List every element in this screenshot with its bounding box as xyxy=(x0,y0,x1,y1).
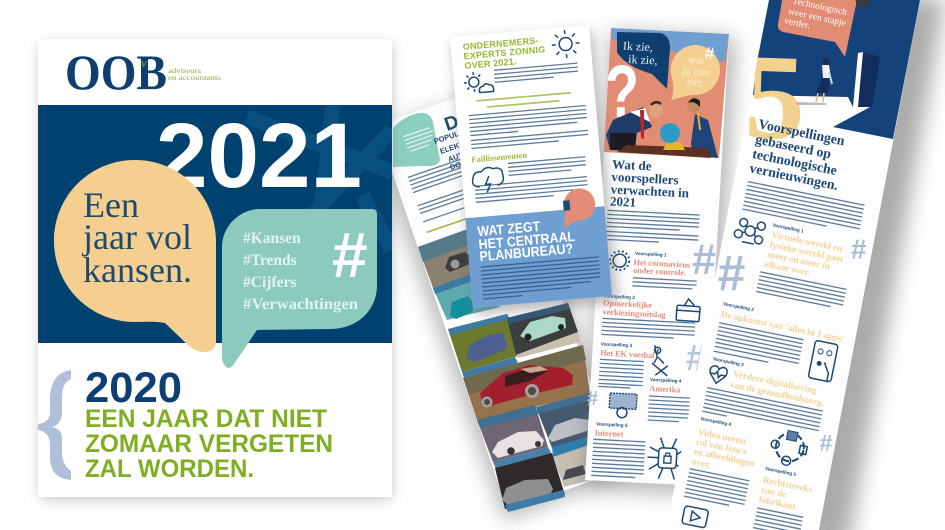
heading: popular electric cars: ELEKTRISCHE xyxy=(439,130,492,156)
item: voorspelling 3: Voorspelling 3 xyxy=(712,356,745,367)
text block: een jaar dat niet zomaar vergeten zal worden: ZAL WORDEN. xyxy=(85,455,254,483)
section: centraal planbureau xyxy=(464,186,612,308)
item: voorspelling 3: Voorspelling 3 xyxy=(601,341,633,348)
speech bubble: hashtags: #Trends xyxy=(243,252,297,269)
photo: dark blue car xyxy=(448,314,518,378)
item: voorspelling 5 xyxy=(591,421,646,478)
number: 5: 5 xyxy=(743,29,808,166)
item: voorspelling 2: Voorspelling 2 xyxy=(723,301,755,312)
speech bubble: technologisch: verder. xyxy=(783,16,811,32)
item: voorspelling 4: over. xyxy=(691,456,712,470)
item: voorspelling 5: van de xyxy=(760,484,787,499)
item: voorspelling 5: Internet xyxy=(594,428,624,439)
icon: hash small: # xyxy=(819,430,833,456)
illustration background: navy room xyxy=(753,0,921,139)
item: voorspelling 3 xyxy=(598,341,656,389)
photo: teal car xyxy=(433,270,500,320)
panel: cover xyxy=(38,39,392,497)
illustration: fortune tellers xyxy=(603,28,729,158)
speech bubble: technologisch xyxy=(778,0,858,57)
heading: voorspellingen gebaseerd op: vernieuwingen. xyxy=(748,160,840,193)
heading: wat de voorspellers verwachten: Wat de xyxy=(612,156,652,173)
speech bubble: ik zie xyxy=(617,32,670,89)
logo: OOB: en accountants xyxy=(168,74,221,82)
item: voorspelling 2: De opkomst van 'alles in 1 apps' xyxy=(720,309,846,344)
item: voorspelling 4: rol van foto's xyxy=(695,437,748,457)
heading: popular electric cars xyxy=(433,107,492,172)
icon: ballot box xyxy=(676,298,701,322)
item: voorspelling 5 xyxy=(752,466,815,530)
heading: wat de voorspellers verwachten: 2021 xyxy=(610,193,636,210)
figure: woman xyxy=(797,58,832,105)
item: voorspelling 3: van de gezondheidszorg. xyxy=(729,379,825,408)
speech bubble: een jaar vol kansen: jaar vol xyxy=(81,217,192,257)
heading: voorspellingen gebaseerd op: Voorspellingen xyxy=(757,116,846,148)
photo: red car xyxy=(463,345,590,420)
photo: white car xyxy=(477,405,552,469)
item: voorspelling 2: Voorspelling 2 xyxy=(603,293,635,300)
heading: ondernemers-experts: OVER 2021. xyxy=(464,56,517,71)
photo: mint green car xyxy=(507,303,580,358)
item: voorspelling 1: Voorspelling 1 xyxy=(635,251,667,258)
heading: wat zegt het centraal planbureau xyxy=(477,215,577,264)
speech bubble: hashtags: #Kansen xyxy=(243,230,301,247)
heading: wat de voorspellers verwachten: verwachten in xyxy=(610,181,690,200)
heading: voorspellingen gebaseerd op: technologische xyxy=(751,146,838,178)
icon: hash: # xyxy=(704,44,715,63)
text block: een jaar dat niet zomaar vergeten zal worden: ZOMAAR VERGETEN xyxy=(85,430,333,458)
item: voorspelling 2: Opmerkelijke xyxy=(603,298,653,310)
speech bubble: hashtags: #Cijfers xyxy=(243,274,296,291)
icon: hash medium: # xyxy=(686,337,706,378)
text block: intro xyxy=(395,111,509,232)
item: voorspelling 4: Amerika xyxy=(649,384,681,395)
speech bubble: wat jij niet ziet xyxy=(671,45,720,100)
text block: planbureau body xyxy=(481,257,601,299)
text block: een jaar dat niet zomaar vergeten zal worden xyxy=(85,405,333,483)
figure: standing man xyxy=(688,97,718,158)
heading: ondernemers-experts: EXPERTS ZONNIG xyxy=(463,44,546,61)
icon: locked chip xyxy=(646,437,687,480)
item: voorspelling 1 xyxy=(756,222,857,309)
photo: bottom right car xyxy=(553,444,592,487)
icon: play button xyxy=(682,506,709,528)
panel: leaflet with electric cars xyxy=(376,86,620,512)
icon: hash small: # xyxy=(587,388,598,410)
heading: voorspellingen gebaseerd op: gebaseerd op xyxy=(754,131,833,162)
item: voorspelling 4 xyxy=(648,377,691,422)
heading: ondernemers-experts: ONDERNEMERS- xyxy=(462,35,539,52)
item: voorspelling 4: Video neemt xyxy=(697,427,748,447)
heading: popular electric cars: AUTO'S xyxy=(447,146,476,164)
panel: leaflet vijf voorspellingen xyxy=(662,0,921,530)
item: voorspelling 4: en afbeeldingen xyxy=(693,446,755,468)
device corner xyxy=(855,0,871,7)
icon: statue of liberty xyxy=(651,345,669,376)
text block: quote xyxy=(476,93,571,108)
text block: intro xyxy=(494,63,578,82)
icon: soccer goal xyxy=(609,393,637,418)
speech bubble: technologisch: weer een stapje xyxy=(787,7,847,29)
panel: leaflet ondernemers-experts xyxy=(450,25,612,308)
speech bubble: hashtags: #Verwachtingen xyxy=(243,296,358,313)
illustration: open door xyxy=(853,52,880,107)
icon: globe with goods xyxy=(768,428,810,469)
speech bubble: logo xyxy=(561,187,597,229)
speech bubble: hashtags: # xyxy=(332,219,368,291)
icon: crystal ball xyxy=(660,123,685,150)
heading: wat zegt het centraal planbureau: HET CENTRAAL xyxy=(478,228,576,252)
text block: bankruptcies xyxy=(473,157,588,202)
item: voorspelling 1: fysieke wereld gaat xyxy=(769,239,845,264)
speech bubble: hashtags xyxy=(222,209,377,368)
text: wat jij niet ziet: jij niet xyxy=(681,67,710,79)
panel: leaflet wat de voorspellers verwachten xyxy=(585,28,729,486)
banner: dark blue xyxy=(38,105,392,343)
item: voorspelling 3: Verdere digitalisering xyxy=(732,369,818,395)
item: voorspelling 1: elkaar over. xyxy=(764,259,811,278)
logo: OOB: adviseurs xyxy=(168,67,201,75)
heading: popular electric cars: DOOR xyxy=(449,156,473,172)
icon: cloud with lightning xyxy=(471,166,504,193)
item: voorspelling 5: Rechtstreeks xyxy=(762,475,814,495)
heading: wat de voorspellers verwachten: voorspellers xyxy=(611,169,679,187)
figure: bending man xyxy=(606,102,663,151)
text block: intro xyxy=(606,210,700,244)
logo: OOB: v xyxy=(141,55,147,70)
icon: sun xyxy=(551,29,581,59)
speech bubble: teal xyxy=(393,113,440,167)
item: voorspelling 5: Voorspelling 5 xyxy=(596,421,628,428)
speech bubble: een jaar vol kansen: Een xyxy=(83,185,139,225)
heading: popular electric cars: DE xyxy=(442,107,474,136)
icon: question mark: ? xyxy=(605,50,639,133)
item: voorspelling 2: verkiezingsuitslag xyxy=(602,307,667,320)
item: voorspelling 1: meer en meer in xyxy=(767,249,831,271)
icon: hash large: # xyxy=(692,236,716,284)
heading: 2020: 2020 xyxy=(85,364,182,412)
item: voorspelling 1: onder controle. xyxy=(633,266,686,278)
heading: wat zegt het centraal planbureau: WAT ZEGT xyxy=(477,218,541,239)
icon: hash left: # xyxy=(717,245,746,301)
heading: 2021: 2021 xyxy=(156,105,362,207)
icon: brace xyxy=(38,370,71,480)
item: voorspelling 3 xyxy=(702,356,829,435)
speech bubble: een jaar vol kansen xyxy=(54,160,216,352)
text block: intro xyxy=(742,182,865,233)
photo: silver car xyxy=(536,393,592,457)
item: voorspelling 4: Voorspelling 4 xyxy=(700,416,732,427)
text: ik zie: ik zie, xyxy=(628,52,658,67)
icon: network xyxy=(733,217,766,246)
heading: faillissementen: Faillissementen xyxy=(471,150,528,165)
text: wat jij niet ziet: wat xyxy=(688,55,704,67)
item: voorspelling 1 xyxy=(609,250,698,289)
item: voorspelling 1: Voorspelling 1 xyxy=(772,222,804,234)
icon: hash right: # xyxy=(851,234,867,265)
item: voorspelling 1: Virtuele wereld en xyxy=(771,230,843,254)
icon: phone xyxy=(808,340,838,383)
icon: sun with cloud xyxy=(463,70,494,94)
item: voorspelling 5: Voorspelling 5 xyxy=(765,466,797,477)
text: wat jij niet ziet: ziet. xyxy=(686,77,704,89)
item: voorspelling 5: fabrikant. xyxy=(758,494,799,512)
icon: heart xyxy=(708,365,728,385)
item: voorspelling 3: Het EK voetbal xyxy=(600,348,655,360)
photo: SUV xyxy=(495,453,565,512)
item: voorspelling 1: Het coronavirus xyxy=(633,258,690,270)
text: ik zie: Ik zie, xyxy=(623,39,653,54)
table xyxy=(617,145,711,158)
item: voorspelling 4: Voorspelling 4 xyxy=(650,377,682,384)
text block: body xyxy=(469,106,589,149)
photo: grey car on beach xyxy=(418,226,490,288)
heading: wat zegt het centraal planbureau: PLANBUREAU? xyxy=(479,240,574,264)
item: voorspelling 2 xyxy=(714,301,847,376)
logo: OOB: OOB xyxy=(65,44,167,100)
heading: popular electric cars: POPULAIRE xyxy=(433,123,477,146)
speech bubble: een jaar vol kansen: kansen. xyxy=(83,250,192,290)
text block: een jaar dat niet zomaar vergeten zal worden: EEN JAAR DAT NIET xyxy=(85,405,327,433)
item: voorspelling 2 xyxy=(601,293,697,339)
item: voorspelling 4 xyxy=(684,416,762,509)
